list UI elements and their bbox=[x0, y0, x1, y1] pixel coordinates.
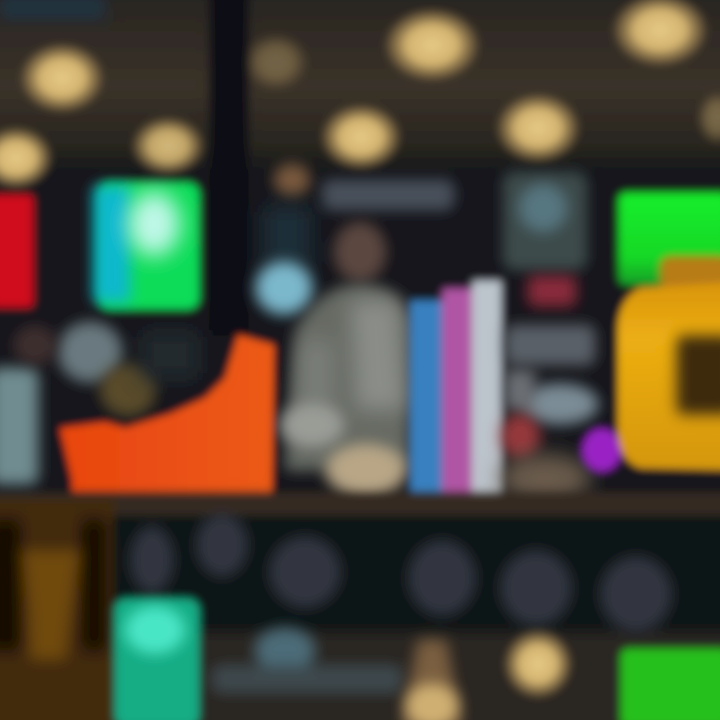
teal and green screen bbox=[94, 182, 200, 310]
ceiling lights bbox=[0, 0, 720, 190]
row of grey circles bbox=[130, 513, 672, 632]
lower lights bbox=[402, 628, 574, 720]
orange area chart bbox=[60, 335, 274, 496]
lower dark band bbox=[0, 516, 720, 632]
right grey shelf items bbox=[499, 325, 598, 502]
lower floor bbox=[110, 632, 720, 720]
blue, pink and white stripes bbox=[410, 280, 502, 504]
rainbow logo and sign bbox=[262, 164, 454, 271]
left shelf items bbox=[0, 322, 200, 484]
dark pillar bbox=[210, 0, 248, 335]
brown trophy panel bbox=[0, 500, 114, 720]
ceiling bbox=[0, 0, 720, 175]
lower grey-blue shape bbox=[212, 628, 402, 693]
light blue glow bbox=[256, 262, 312, 314]
red panel bbox=[0, 194, 34, 308]
grey round sign bbox=[503, 172, 587, 306]
purple item bbox=[582, 428, 622, 472]
central figure bbox=[280, 222, 410, 496]
counter bbox=[0, 492, 720, 520]
teal lower block bbox=[114, 598, 200, 720]
green lower panel bbox=[620, 648, 720, 720]
bright green panel bbox=[618, 192, 720, 286]
yellow jar bbox=[618, 256, 720, 470]
